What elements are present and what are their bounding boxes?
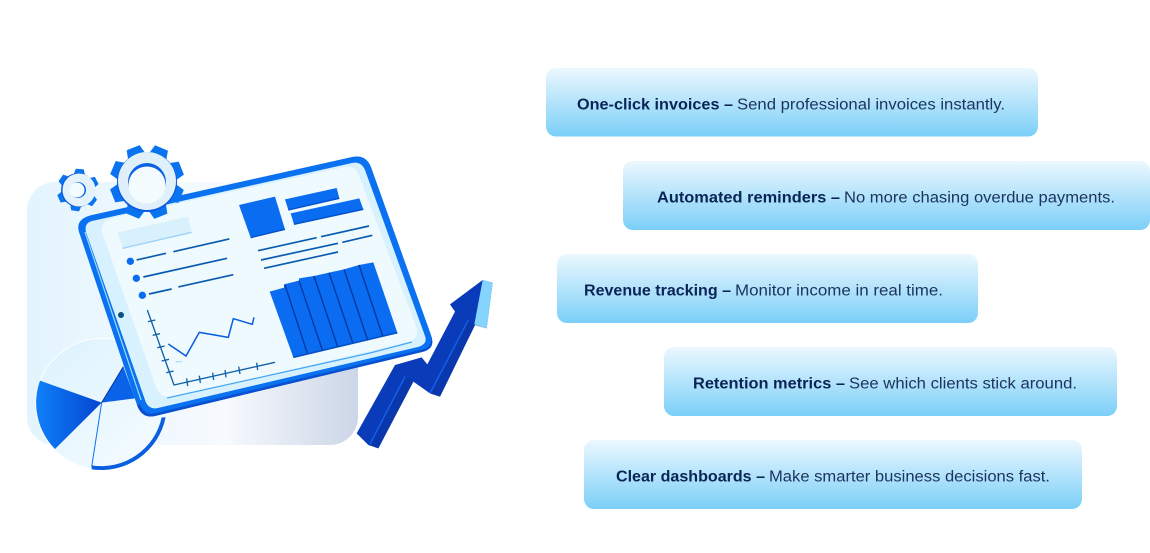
placeholder heading <box>118 217 192 248</box>
feature: automated reminders <box>623 161 1150 230</box>
pie chart <box>36 338 167 470</box>
feature: revenue tracking: Monitor income in real time. <box>735 282 943 300</box>
blue square <box>239 197 285 238</box>
feature: revenue tracking: Revenue tracking – <box>584 282 731 300</box>
header bars <box>285 188 339 210</box>
feature: clear dashboards <box>584 440 1082 509</box>
feature: retention metrics: Retention metrics – <box>693 376 845 392</box>
tablet screen <box>102 167 417 398</box>
tablet body <box>78 156 432 417</box>
feature: clear dashboards: Make smarter business decisions fast. <box>769 468 1050 486</box>
feature: automated reminders: No more chasing overdue payments. <box>844 190 1115 206</box>
feature: clear dashboards: Clear dashboards – <box>616 468 765 486</box>
feature: one-click invoices: One-click invoices – <box>577 96 733 114</box>
feature: one-click invoices: Send professional invoices instantly. <box>737 96 1005 114</box>
background panel <box>27 182 358 445</box>
feature: revenue tracking <box>557 254 978 323</box>
feature: one-click invoices <box>546 68 1038 136</box>
feature: retention metrics <box>664 347 1117 416</box>
icon: large gear <box>109 144 185 220</box>
feature: automated reminders: Automated reminders – <box>657 190 840 206</box>
camera dot <box>118 312 124 318</box>
left text block <box>118 217 233 299</box>
feature: retention metrics: See which clients stick around. <box>849 376 1077 392</box>
right header and bars <box>239 188 397 357</box>
tablet <box>78 156 432 417</box>
bar chart <box>270 262 397 357</box>
icon: small gear <box>56 169 99 212</box>
icon: growth arrow <box>357 280 493 448</box>
line chart <box>147 310 275 386</box>
